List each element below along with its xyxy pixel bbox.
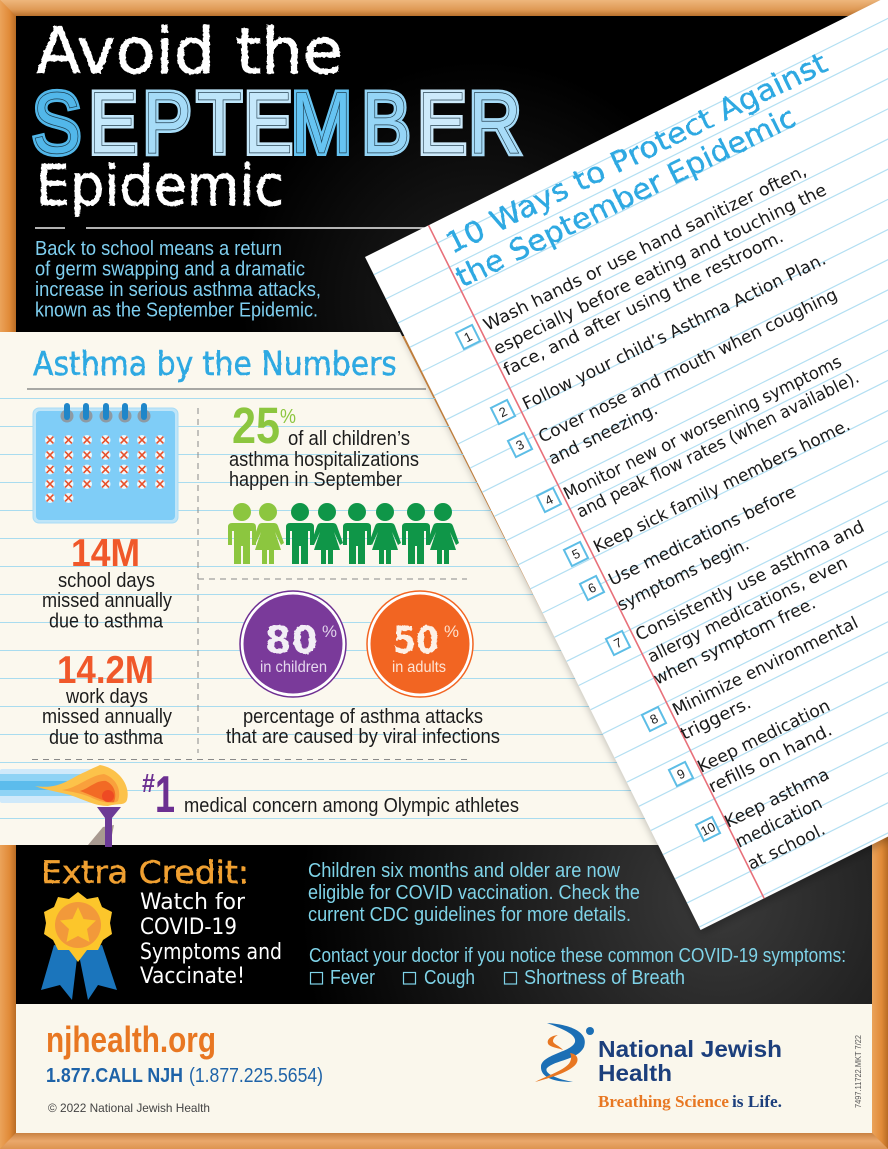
list: ten ways: refills on hand. <box>705 720 836 797</box>
text: covid vaccination: eligible for COVID vaccination. Check the <box>308 881 640 904</box>
caption: viral infections <box>226 705 500 748</box>
list: ten ways: when symptom free. <box>650 593 819 689</box>
stat: 14M school days: 14M <box>71 532 140 575</box>
list: ten ways: and peak flow rates (when available). <box>573 368 863 522</box>
text: watch for covid: Symptoms and <box>140 940 282 965</box>
badge: 80 percent in children <box>240 591 346 697</box>
intro text <box>35 237 321 322</box>
panel: notebook paper <box>365 0 888 930</box>
list: ten ways: symptoms begin. <box>614 534 753 615</box>
caption: viral infections: percentage of asthma attacks <box>243 705 483 728</box>
print code: 7497.11722.MKT 7/22 <box>854 1034 863 1108</box>
badge: 50 percent in adults: % <box>444 622 459 641</box>
icon: row of children <box>228 503 459 564</box>
intro text: of germ swapping and a dramatic <box>35 258 305 280</box>
chalkboard upper <box>16 16 872 336</box>
text: covid vaccination: Children six months and older are now <box>308 859 620 882</box>
number boxes: 4 <box>542 492 556 508</box>
stat: 14M school days <box>42 532 173 632</box>
stat: 25 percent hospitalizations: asthma hospitalizations <box>229 448 419 471</box>
stat: 25 percent hospitalizations <box>229 397 419 491</box>
number boxes: 9 <box>674 766 688 782</box>
list: ten ways: medication <box>732 793 826 852</box>
heading: asthma by the numbers: Asthma by the Numbers <box>33 344 397 383</box>
text: covid symptoms checklist: Cough <box>424 966 475 989</box>
logo: national jewish health: National Jewish <box>598 1036 782 1062</box>
stat: number one olympic concern: 1 <box>155 766 175 824</box>
chalkboard lower <box>16 840 872 1005</box>
stat: number one olympic concern: # <box>142 768 155 798</box>
list: ten ways: Use medications before <box>605 482 799 590</box>
logo: national jewish health: Health <box>598 1060 672 1086</box>
stat: number one olympic concern: medical concern among Olympic athletes <box>184 794 519 817</box>
list: ten ways: Monitor new or worsening symptoms <box>560 352 845 504</box>
heading: 10 ways to protect: 10 Ways to Protect Against <box>440 46 833 260</box>
badge: 80 percent in children: % <box>322 622 337 641</box>
badge: 50 percent in adults <box>367 591 473 697</box>
stat: 14.2M work days: work days <box>65 685 148 708</box>
icon: olympic torch <box>0 765 128 847</box>
stat: 25 percent hospitalizations: % <box>280 406 296 428</box>
list: ten ways: allergy medications, even <box>644 553 851 667</box>
text: covid vaccination: current CDC guidelines for more details. <box>308 903 631 926</box>
title: SEPTEMBER: SEPTEMBER <box>32 75 521 171</box>
stat: 14.2M work days <box>42 649 173 749</box>
list: ten ways: Cover nose and mouth when coughing <box>535 285 841 447</box>
copyright: © 2022 National Jewish Health <box>48 1101 210 1115</box>
text: watch for covid: Watch for <box>140 890 246 915</box>
text: website and phone: 1.877.CALL NJH <box>46 1065 183 1087</box>
title: SEPTEMBER: SEPTEMBER <box>32 75 521 171</box>
number boxes: 8 <box>647 711 661 727</box>
intro text: known as the September Epidemic. <box>35 298 318 322</box>
badge: 80 percent in children: in children <box>260 659 327 676</box>
badge: 50 percent in adults: 50 <box>393 619 439 662</box>
stat: 14.2M work days: due to asthma <box>49 726 164 749</box>
title: SEPTEMBER: SEPTEMBER <box>32 75 521 171</box>
number boxes: 6 <box>585 580 599 596</box>
list: ten ways: Keep sick family members home. <box>590 415 854 557</box>
number boxes <box>456 325 720 841</box>
logo: national jewish health: is Life. <box>732 1092 782 1111</box>
caption: viral infections: that are caused by viral infections <box>226 725 500 748</box>
list: ten ways: triggers. <box>677 693 755 744</box>
text: covid symptoms checklist: Fever <box>330 966 375 989</box>
list: ten ways: Keep asthma <box>721 765 833 832</box>
icon: medal <box>41 892 117 1000</box>
number boxes: 7 <box>611 635 625 651</box>
logo: national jewish health: Breathing Science <box>598 1092 729 1111</box>
text: website and phone: njhealth.org <box>46 1019 216 1060</box>
stat: 25 percent hospitalizations: happen in September <box>229 468 402 491</box>
panel: extra credit <box>41 855 282 1000</box>
stat: 14.2M work days: missed annually <box>42 705 173 728</box>
text: covid symptoms checklist: Shortness of Breath <box>524 966 685 989</box>
text: covid symptoms checklist <box>309 944 846 989</box>
list: ten ways: at school. <box>744 820 829 874</box>
number boxes: 5 <box>569 546 583 562</box>
text: watch for covid: Vaccinate! <box>140 964 245 989</box>
list: ten ways: especially before eating and touching the <box>490 180 830 359</box>
panel: extra credit: Extra Credit: <box>41 855 249 891</box>
text: website and phone: (1.877.225.5654) <box>189 1065 323 1087</box>
stat: number one olympic concern <box>142 766 519 824</box>
badge: 50 percent in adults: in adults <box>392 659 446 676</box>
number boxes: 2 <box>496 404 510 420</box>
stat: 14M school days: due to asthma <box>49 610 164 632</box>
text: website and phone <box>46 1019 323 1087</box>
list: ten ways: Follow your child’s Asthma Action Plan. <box>519 250 829 414</box>
icon: calendar <box>33 403 178 523</box>
badge: 80 percent in children: 80 <box>265 619 318 662</box>
panel: asthma by the numbers <box>0 332 660 847</box>
stat: 14M school days: school days <box>58 569 155 592</box>
list: ten ways: face, and after using the restroom. <box>500 227 787 380</box>
heading: 10 ways to protect: the September Epidemic <box>450 100 801 294</box>
text: watch for covid <box>140 890 282 989</box>
stat: 25 percent hospitalizations: 25 <box>232 397 280 454</box>
list: ten ways <box>480 161 868 874</box>
list: ten ways: Keep medication <box>694 696 834 777</box>
panel: footer <box>16 1004 872 1133</box>
stat: 14.2M work days: 14.2M <box>57 649 154 692</box>
number boxes: 10 <box>698 819 718 839</box>
intro text: Back to school means a return <box>35 237 282 260</box>
text: watch for covid: COVID-19 <box>140 915 237 940</box>
number boxes: 1 <box>461 329 475 345</box>
text: covid vaccination <box>308 859 640 926</box>
intro text: increase in serious asthma attacks, <box>35 278 321 301</box>
title: Avoid the: Avoid the <box>36 15 343 88</box>
list: ten ways: and sneezing. <box>545 399 661 469</box>
number boxes: 3 <box>513 437 527 453</box>
stat: 25 percent hospitalizations: of all children’s <box>288 427 410 450</box>
stat: 14M school days: missed annually <box>42 589 173 612</box>
list: ten ways: Minimize environmental <box>669 613 862 720</box>
list: ten ways: Consistently use asthma and <box>632 517 868 645</box>
logo: national jewish health <box>535 1023 782 1111</box>
title: Epidemic: Epidemic <box>36 154 284 219</box>
list: ten ways: Wash hands or use hand sanitizer often, <box>480 161 810 335</box>
